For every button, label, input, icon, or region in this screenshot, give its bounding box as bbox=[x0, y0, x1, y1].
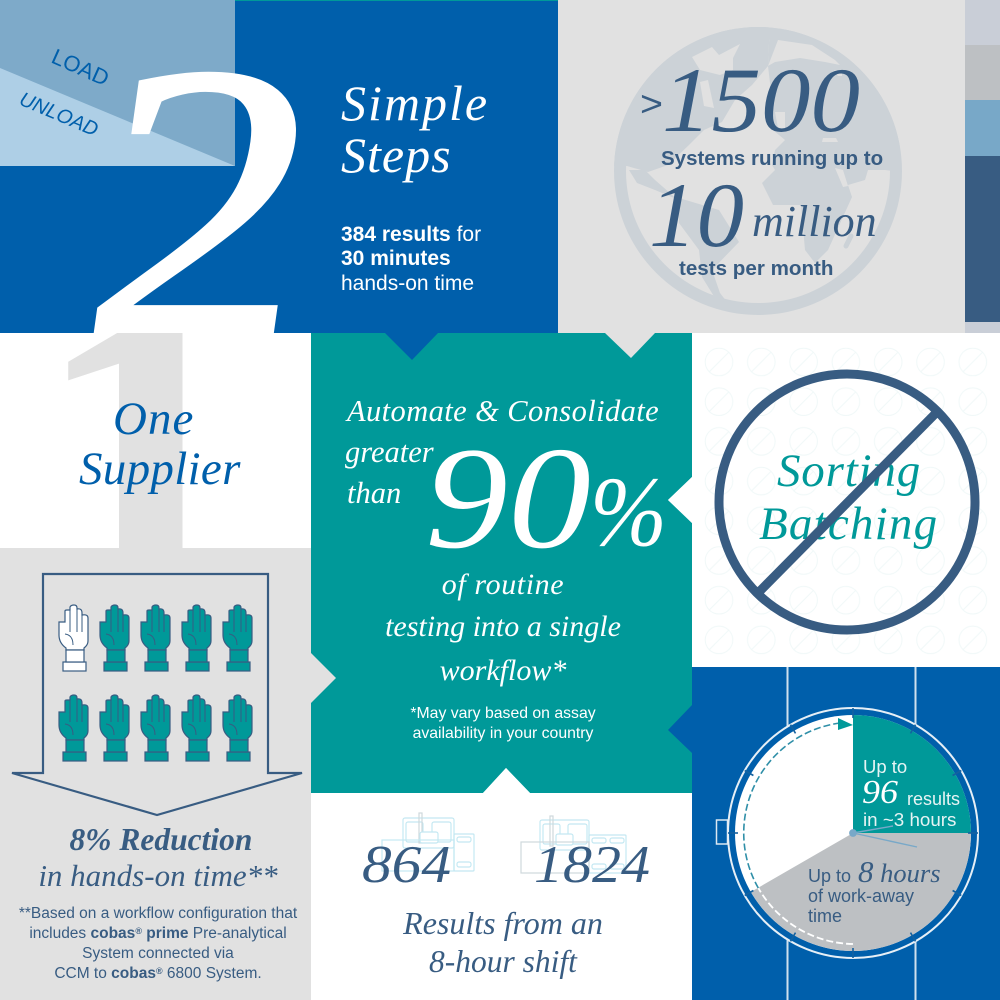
text: 384 results: for bbox=[451, 223, 481, 246]
heading: simple steps: Steps bbox=[341, 127, 452, 183]
text: work-away time: time bbox=[808, 906, 842, 926]
text: tests per month: tests per month bbox=[679, 257, 833, 280]
icon: globe bbox=[600, 20, 902, 315]
icon: analyzer small bbox=[382, 813, 474, 871]
footnote: System connected via bbox=[82, 945, 234, 962]
panel: watch bbox=[692, 667, 1000, 1000]
heading: automate and consolidate: Automate & Consolidate bbox=[345, 394, 659, 428]
arrow outline bbox=[12, 574, 302, 815]
heading: one supplier: Supplier bbox=[79, 443, 241, 495]
text: sorting batching: Sorting bbox=[777, 445, 921, 497]
load and unload graphic: LOAD bbox=[48, 44, 113, 91]
text: up to: Up to bbox=[863, 756, 907, 777]
load and unload graphic: UNLOAD bbox=[16, 88, 101, 141]
stat: 90 percent: 90 bbox=[425, 417, 591, 579]
panel: two simple steps bbox=[0, 0, 558, 333]
stat: greater than 1500: > bbox=[640, 83, 663, 124]
text: greater than: than bbox=[347, 476, 401, 510]
icon: analyzer large bbox=[521, 816, 626, 873]
footnote: CCM to cobas bbox=[54, 965, 156, 982]
text: results from shift: 8-hour shift bbox=[429, 944, 578, 979]
text: work-away time: of work-away bbox=[808, 886, 914, 906]
stat: 10 million: 10 bbox=[649, 164, 744, 266]
text: results from shift: Results from an bbox=[402, 905, 603, 941]
footnote: availability: availability in your country bbox=[413, 725, 594, 742]
stat: 1824: 1824 bbox=[534, 836, 650, 894]
footnote: prime bbox=[142, 925, 189, 942]
text: results in 3 hours: in ~3 hours bbox=[863, 809, 956, 830]
text: sorting batching: Batching bbox=[759, 498, 938, 550]
big numeral 1: 1 bbox=[32, 210, 257, 708]
panel: hands-on reduction bbox=[0, 548, 311, 1000]
icon: watch crown bbox=[716, 820, 728, 844]
stat: 10 million: million bbox=[752, 197, 877, 246]
panel: no sorting or batching bbox=[668, 333, 1000, 667]
arrowhead bbox=[838, 718, 853, 730]
text: work-away time: Up to bbox=[808, 866, 851, 886]
text: greater than: greater bbox=[345, 435, 434, 469]
panel: one supplier bbox=[68, 333, 240, 548]
footnote: includes cobas bbox=[29, 925, 135, 942]
icon: prohibition sign bbox=[719, 374, 975, 630]
heading: 8% reduction: 8% Reduction bbox=[70, 822, 252, 857]
stat: 90 percent bbox=[425, 417, 667, 579]
dial ticks bbox=[728, 708, 978, 958]
chart: watch dial bbox=[728, 708, 978, 958]
footnote: ® bbox=[156, 966, 163, 976]
dashed elapsed arc bbox=[758, 888, 853, 944]
text: routine testing: workflow* bbox=[440, 654, 566, 687]
heading: simple steps: Simple bbox=[341, 75, 489, 131]
heading: 8% reduction: in hands-on time** bbox=[38, 858, 278, 893]
stat: 96: 96 bbox=[862, 774, 898, 811]
panel: global systems bbox=[558, 0, 965, 333]
text: 384 results: 384 results bbox=[341, 223, 451, 246]
text: routine testing: of routine bbox=[442, 568, 564, 601]
panel: results per shift bbox=[311, 768, 692, 1000]
text: routine testing: testing into a single bbox=[385, 610, 621, 643]
stat: 10 million bbox=[649, 164, 877, 266]
footnote: Pre-analytical bbox=[29, 925, 287, 942]
footnote: 6800 System. bbox=[163, 965, 262, 982]
color strip bbox=[965, 0, 1000, 333]
text: systems running: Systems running up to bbox=[661, 147, 883, 170]
footnote: ® bbox=[135, 926, 142, 936]
text: 384 results: hands-on time bbox=[341, 272, 474, 295]
text: 384 results: 30 minutes bbox=[341, 247, 451, 270]
icon: hands bbox=[59, 605, 252, 761]
stat: 864: 864 bbox=[362, 836, 451, 894]
footnote: **Based on a workflow configuration that bbox=[19, 905, 298, 922]
text: results in 3 hours: results bbox=[907, 789, 960, 809]
stat: 90 percent: % bbox=[590, 456, 667, 567]
watch hands bbox=[850, 826, 917, 847]
stat: 8 hours: 8 hours bbox=[858, 854, 941, 889]
heading: one supplier: One bbox=[113, 393, 194, 445]
load and unload graphic bbox=[0, 0, 235, 166]
panel: automate and consolidate bbox=[311, 333, 692, 793]
footnote: availability: *May vary based on assay bbox=[410, 705, 596, 722]
stat: greater than 1500: 1500 bbox=[662, 49, 860, 151]
